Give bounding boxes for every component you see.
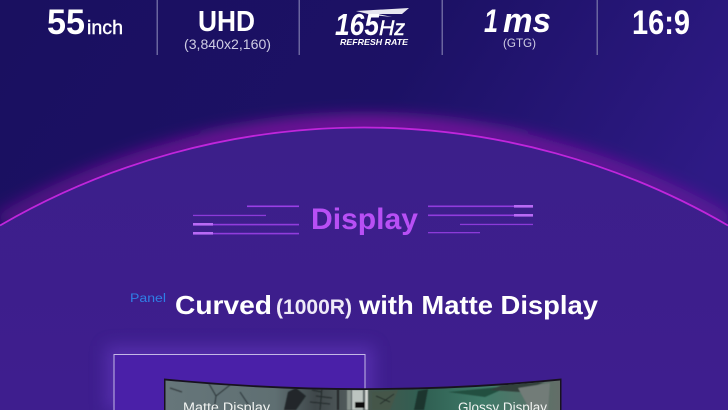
heading text: Display bbox=[311, 203, 418, 236]
screen scene details bbox=[170, 382, 550, 410]
highlight box bbox=[114, 354, 365, 410]
spec: screen size bbox=[47, 3, 123, 42]
spec: screen size: 55 bbox=[47, 3, 85, 42]
spec: refresh rate: 165 bbox=[335, 7, 380, 42]
arc line bbox=[0, 127, 728, 226]
spec: resolution: (3,840x2,160) bbox=[184, 37, 271, 52]
spec: refresh rate bbox=[335, 7, 409, 47]
spec: refresh rate: Hz bbox=[379, 17, 405, 40]
arc stage bbox=[0, 127, 728, 410]
divider bbox=[156, 0, 158, 55]
panel title: Curved bbox=[175, 290, 272, 320]
heading lines left bbox=[193, 206, 299, 235]
spec: response time: (GTG) bbox=[503, 36, 536, 50]
monitor screens bbox=[165, 380, 561, 410]
divider bbox=[298, 0, 300, 55]
highlight box border bbox=[114, 354, 365, 410]
spec: response time: 1 bbox=[484, 3, 498, 39]
panel title: with Matte Display bbox=[358, 290, 599, 320]
arc glow bbox=[0, 125, 728, 222]
section heading: Display bbox=[193, 203, 533, 236]
divider bbox=[442, 0, 443, 55]
spec: resolution: UHD bbox=[198, 6, 255, 38]
panel title: (1000R) bbox=[276, 296, 352, 319]
panel title bbox=[175, 290, 599, 320]
spec: screen size: inch bbox=[87, 18, 123, 39]
panel label: Panel bbox=[130, 293, 166, 305]
heading lines right bbox=[428, 205, 533, 233]
spec bar bbox=[47, 0, 690, 55]
spec: response time: ms bbox=[503, 2, 551, 40]
spec: refresh rate: REFRESH RATE bbox=[340, 37, 408, 47]
curved monitor bbox=[164, 378, 562, 410]
spec: resolution bbox=[184, 6, 271, 52]
highlight box glow bbox=[106, 346, 374, 410]
matte screen bbox=[165, 380, 365, 410]
spec: response time bbox=[484, 2, 551, 50]
divider bbox=[596, 0, 598, 55]
spec: aspect ratio: 16:9 bbox=[632, 4, 690, 42]
monitor frame bbox=[164, 378, 562, 410]
glossy screen bbox=[365, 380, 561, 410]
